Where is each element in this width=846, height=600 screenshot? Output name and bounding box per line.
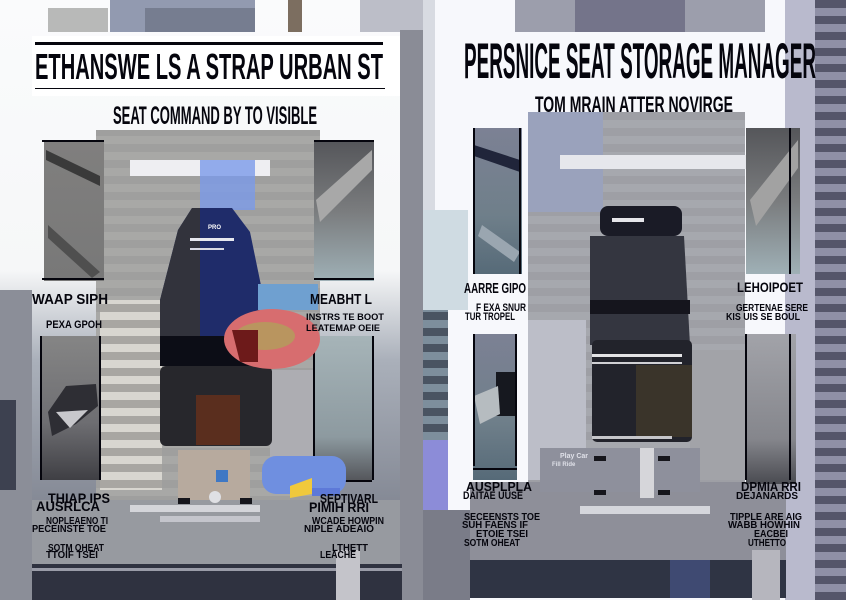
label: upper right, right side: KIS UIS SE BOUL (726, 312, 800, 323)
seat: right (470, 112, 786, 560)
label: upper left, left side (32, 291, 108, 331)
label: upper right, left side: TUR TROPEL (465, 311, 515, 323)
label: lower left, right side: LTHETT (332, 543, 368, 554)
label: upper left, right side: MEABHT L (310, 291, 372, 308)
label: lower left, right side: NIPLE ADEAIO (304, 524, 374, 535)
label: lower right, left side: SOTM OHEAT (464, 538, 520, 549)
bottom dark band (32, 550, 786, 600)
label: lower left, left side: TTOIF TSEI (46, 550, 98, 561)
label: upper left, right side (306, 291, 385, 333)
label: lower right, left side: DAITAE UUSE (463, 490, 523, 502)
label: lower right, left side (462, 479, 540, 549)
product: blue accessories, left (178, 450, 346, 504)
label: upper right, left side: F EXA SNUR (476, 302, 526, 314)
label: lower right, left side: SECEENSTS TOE (464, 512, 540, 523)
detail panel: lower left, right side (313, 336, 374, 482)
label: lower right, right side: UTHETTO (748, 538, 786, 549)
label: lower right, right side: WABB HOWHIN (728, 520, 800, 531)
subtitle: right: TOM MRAIN ATTER NOVIRGE (535, 92, 733, 117)
subtitle: left: SEAT COMMAND BY TO VISIBLE (113, 102, 317, 130)
label: lower right, right side: DPMIA RRI (741, 479, 801, 494)
label: lower left, right side (304, 491, 384, 561)
label: upper right, right side: GERTENAE SERE (736, 303, 808, 314)
product: accessories, right: Fill Ride (552, 462, 576, 468)
label: lower right, right side: TIPPLE ARE AIG (730, 512, 802, 523)
detail panel: upper left, right side (314, 140, 374, 281)
label: upper left, right side: INSTRS TE BOOT (306, 312, 385, 322)
label: upper right, left side (464, 280, 526, 323)
product: navy organizer, left (160, 208, 272, 446)
label: lower left, left side: THIAP IPS (48, 490, 110, 506)
label: lower left, right side: WCADE HOWPIN (312, 516, 384, 527)
label: lower right, left side: ETOIE TSEI (476, 529, 528, 540)
product: red oval cushion (224, 284, 320, 369)
seat: left (32, 130, 400, 564)
background: right half (423, 0, 846, 600)
product: dark organizer, right (590, 206, 692, 442)
label: lower right, right side: EACBEI (754, 529, 788, 540)
detail panel: upper right, right side (746, 128, 800, 274)
product tray highlights, left (130, 505, 260, 522)
product: accessories, right (540, 448, 710, 514)
label: lower left, right side: LEACHE (320, 550, 356, 561)
label: upper left, right side: LEATEMAP OEIE (306, 323, 380, 333)
label: upper left, left side: WAAP SIPH (32, 291, 108, 308)
label: lower left, left side: SOTM OHEAT (48, 543, 104, 554)
detail panel: lower right, right side (745, 334, 796, 484)
label: lower left, left side (32, 490, 110, 561)
detail panel: lower right, left side (473, 334, 517, 480)
label: upper right, right side: LEHOIPOET (737, 279, 803, 295)
detail panel: upper left, left side (42, 140, 104, 281)
label: lower left, right side: SEPTIVARL (320, 491, 378, 506)
title: left: ETHANSWE LS A STRAP URBAN ST (35, 46, 383, 87)
label: lower left, left side: PECEINSTE TOE (32, 524, 106, 535)
label: lower right, left side: AUSPLPLA (466, 479, 533, 494)
label: upper right, right side (726, 279, 808, 323)
label: lower left, left side: NOPLEAENO TI (46, 516, 108, 527)
title: left (35, 42, 385, 89)
label: lower right, right side (728, 479, 802, 549)
product: accessories, right: Play Car (560, 453, 588, 460)
label: upper right, left side: AARRE GIPO (464, 280, 526, 297)
detail panel: lower left, left side (40, 336, 101, 480)
label: lower right, left side: SUH FAENS IF (462, 520, 528, 531)
label: lower left, right side: PIMIH RRI (309, 499, 369, 515)
detail panel: upper right, left side (473, 128, 522, 274)
label: lower left, left side: AUSRLCA (36, 498, 100, 514)
label: lower right, right side: DEJANARDS (736, 491, 798, 502)
label: upper left, left side: PEXA GPOH (46, 319, 102, 331)
background: left half (0, 0, 423, 600)
product: navy organizer, left: PRO (208, 225, 221, 231)
